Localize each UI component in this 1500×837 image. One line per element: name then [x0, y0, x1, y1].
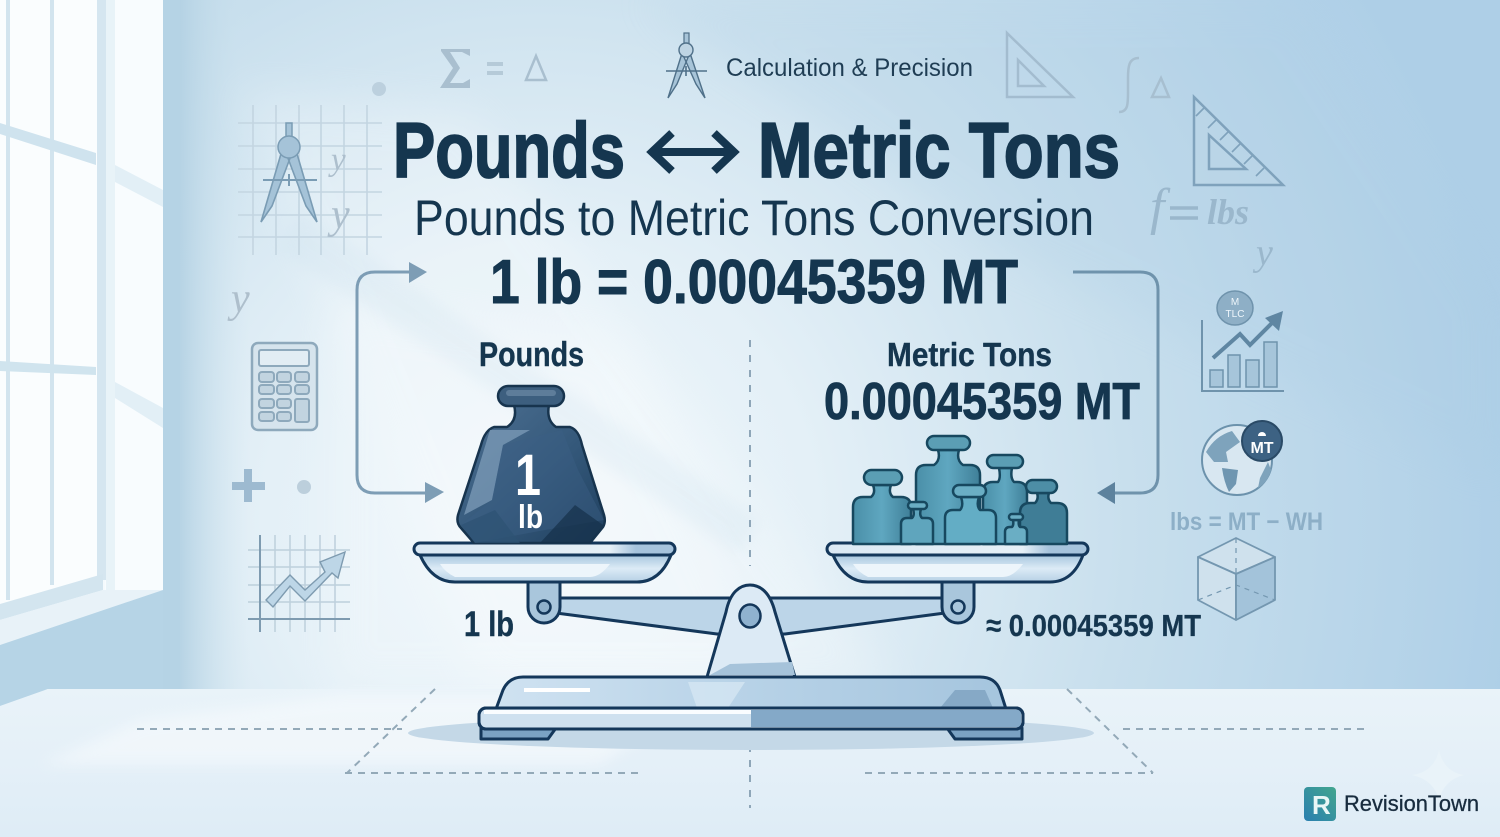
badge: M [1231, 297, 1239, 308]
label: metric tons heading: Metric Tons [887, 336, 1052, 373]
icon: growth chart left [248, 535, 350, 632]
decorative sparkle [1412, 750, 1464, 800]
value: metric tons: 0.00045359 MT [824, 373, 1140, 431]
icon: double-headed arrow [652, 133, 734, 171]
tall weight [916, 436, 980, 544]
shadow under scale [408, 716, 1094, 750]
right weight [1020, 480, 1067, 544]
weight: 1 lb: lb [518, 498, 543, 535]
label: 1 lb under pan: 1 lb [464, 605, 514, 644]
logo mark: R [1312, 790, 1331, 820]
icon: grid with compass: y [327, 192, 350, 238]
label: approx metric tons: ≈ 0.00045359 MT [986, 608, 1201, 643]
logo wordmark: RevisionTown [1344, 791, 1479, 816]
icon: globe with MT badge [1202, 421, 1282, 495]
badge [1217, 291, 1253, 325]
tiny weight [1005, 514, 1027, 544]
logo: RevisionTown [1304, 787, 1479, 821]
center dashed divider [749, 340, 751, 808]
small weight [901, 502, 933, 544]
formula: f equals lbs: f [1150, 179, 1171, 236]
main title [393, 106, 1120, 194]
symbols: integral delta [1119, 58, 1169, 112]
arrow: left connector [357, 262, 444, 503]
dot [297, 480, 311, 494]
arrow: right connector [1073, 272, 1158, 504]
scale: fulcrum post [707, 585, 795, 677]
icon: set square top [1007, 33, 1073, 97]
weight: 1 lb [457, 386, 605, 543]
icon: large set square [1194, 97, 1283, 185]
icon: globe with MT badge: MT [1250, 440, 1274, 457]
icon: compass top [666, 33, 707, 98]
front weight [945, 485, 996, 544]
icon: calculator [252, 343, 317, 430]
icon: grid with compass: y [328, 142, 346, 178]
main title: Metric Tons [758, 106, 1120, 194]
caption: calculation and precision: Calculation & Precision [726, 54, 973, 82]
left weight [853, 470, 911, 544]
floor perspective dashes [137, 689, 1365, 773]
icon: cube [1198, 538, 1275, 620]
scale: base dome [496, 677, 1006, 709]
floor [0, 689, 1500, 837]
dot [372, 82, 386, 96]
scale: base feet [481, 728, 1022, 739]
symbol: y right: y [1252, 232, 1273, 274]
label: pounds heading: Pounds [479, 336, 584, 374]
balance scale [414, 543, 1088, 739]
scale: left hanger [528, 578, 560, 623]
scale: right hanger [942, 578, 974, 623]
decorative symbols: sum equals delta [440, 49, 546, 88]
badge: TLC [1226, 309, 1244, 320]
scale: beam [556, 598, 945, 634]
metric weights group [853, 436, 1067, 544]
formula: f equals lbs [1150, 179, 1249, 236]
main title: Pounds [393, 106, 625, 194]
icon: grid with compass [238, 105, 382, 255]
scale: base slab [479, 708, 1023, 729]
scale: left pan [414, 543, 675, 582]
formula label: lbs MT WH: lbs = MT − WH [1170, 508, 1323, 536]
formula: f equals lbs: lbs [1207, 192, 1249, 232]
icon: y left: y [227, 276, 250, 322]
icon: plus [232, 469, 265, 502]
weight label: 1 [515, 443, 541, 508]
subtitle: Pounds to Metric Tons Conversion [414, 190, 1094, 246]
icon: bar chart right [1202, 291, 1284, 391]
scale: right pan [827, 543, 1088, 582]
conversion formula: 1 lb = 0.00045359 MT [490, 248, 1018, 317]
window [0, 0, 180, 706]
medium weight [983, 455, 1027, 544]
logo mark [1304, 787, 1336, 821]
